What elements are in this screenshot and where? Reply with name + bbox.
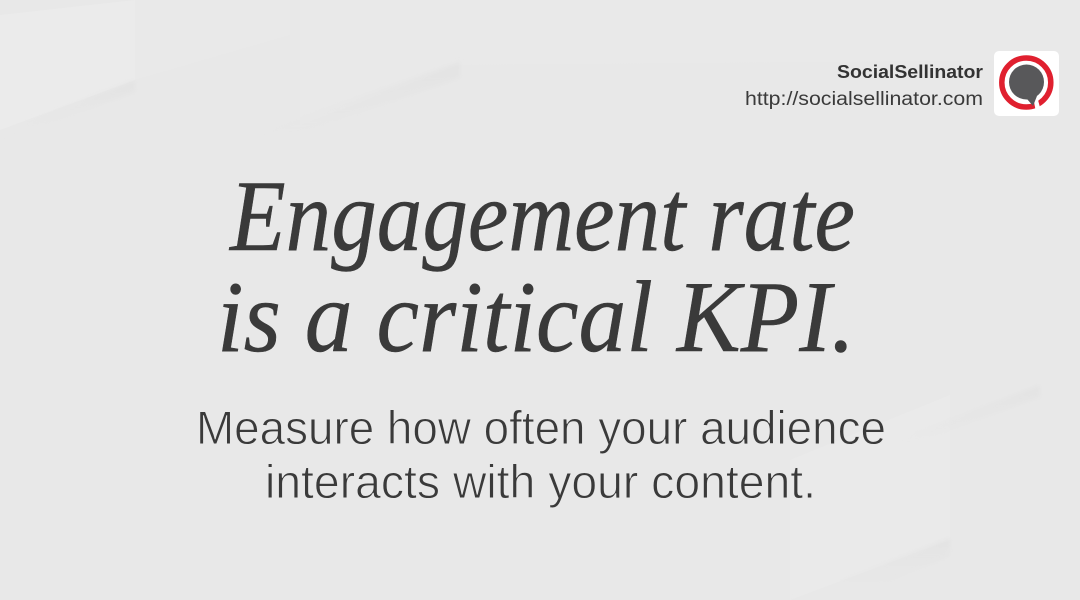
subtitle bbox=[196, 401, 886, 508]
subtitle line 1: Measure how often your audience bbox=[196, 401, 886, 454]
brand url: http://socialsellinator.com bbox=[745, 89, 983, 110]
brand name: SocialSellinator bbox=[837, 62, 983, 82]
title bbox=[217, 160, 855, 374]
subtitle line 2: interacts with your content. bbox=[265, 455, 816, 508]
title line 2: is a critical KPI. bbox=[217, 261, 855, 374]
icon: logo bbox=[994, 51, 1059, 116]
title line 1: Engagement rate bbox=[228, 160, 855, 273]
